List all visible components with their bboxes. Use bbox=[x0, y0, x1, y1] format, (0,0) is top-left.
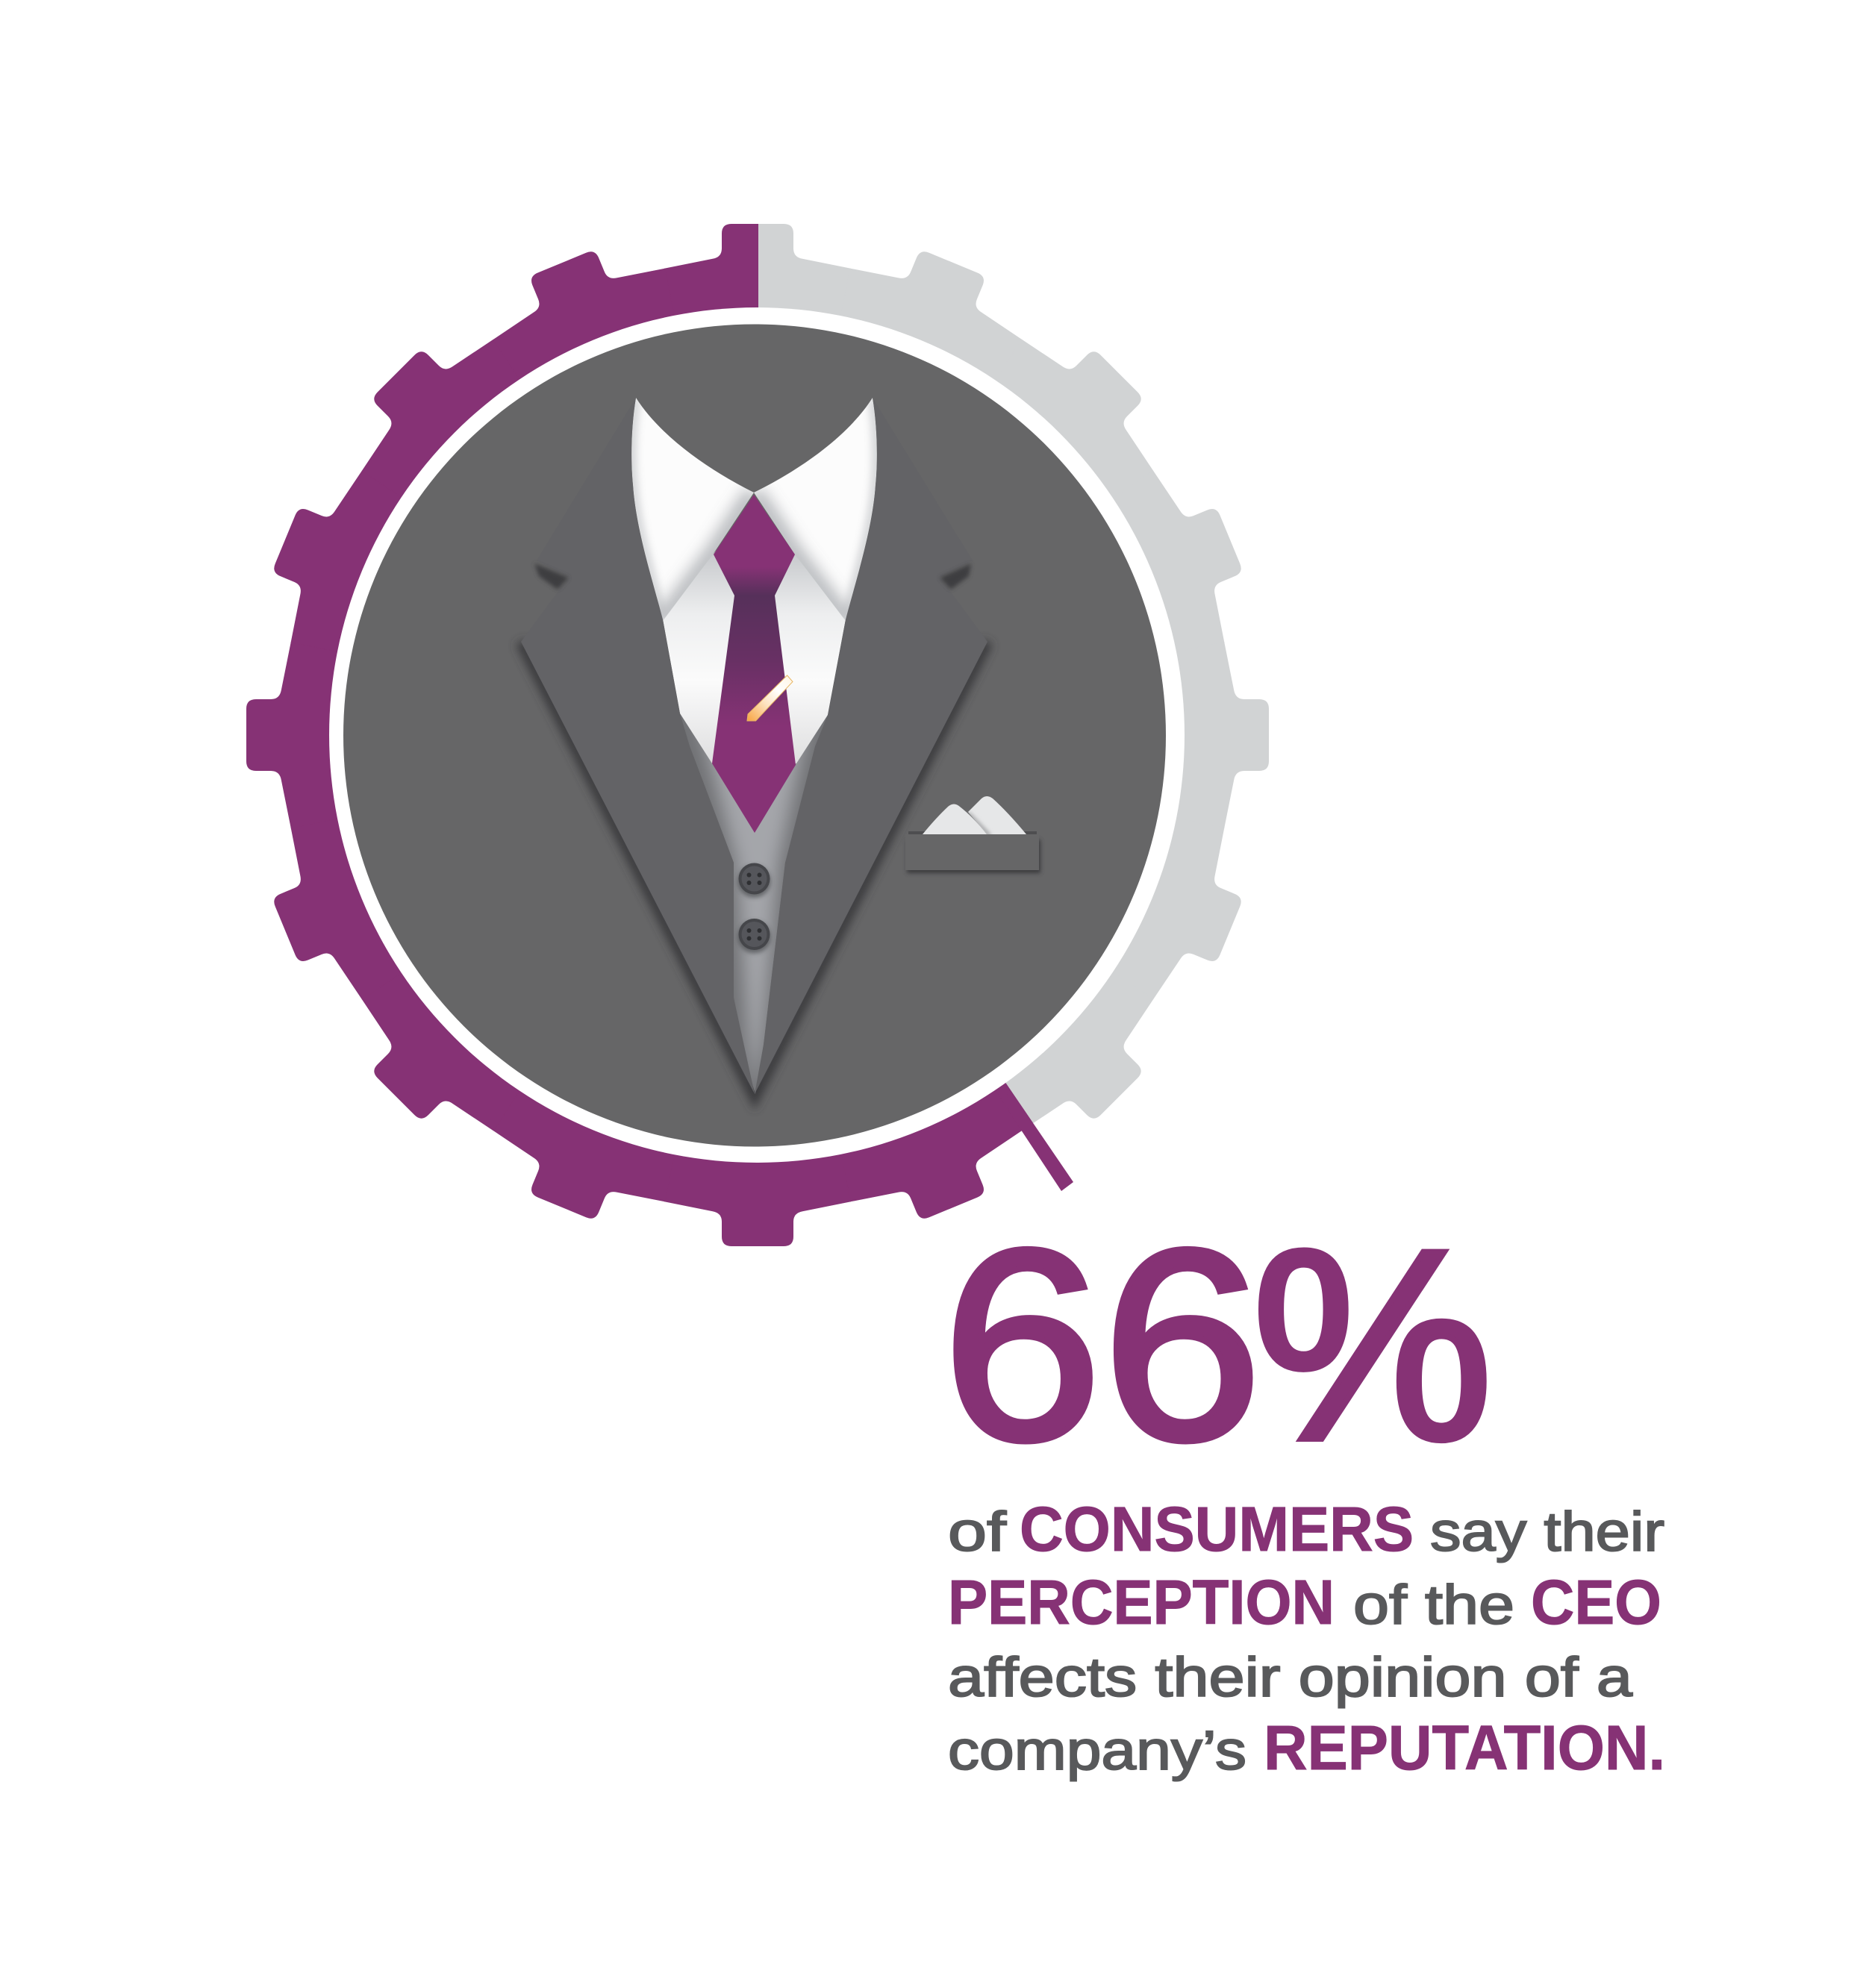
left lapel notch bbox=[534, 563, 569, 590]
progress tick mark bbox=[1006, 1084, 1073, 1191]
line 4: REPUTATION. bbox=[1264, 1713, 1665, 1783]
left lapel bbox=[521, 398, 755, 1094]
white ring bbox=[329, 307, 1185, 1163]
right lapel notch bbox=[940, 563, 971, 590]
line 4: company’s bbox=[948, 1719, 1246, 1781]
suit illustration bbox=[521, 388, 1040, 1097]
right lapel bbox=[755, 398, 987, 1094]
percent sign: % bbox=[1252, 1193, 1494, 1497]
pocket square bbox=[905, 796, 1040, 873]
gear: gray remainder bbox=[246, 224, 1269, 1246]
tie clip bbox=[747, 675, 793, 721]
line 2: PERCEPTION bbox=[948, 1567, 1335, 1637]
digits 66: 66 bbox=[942, 1193, 1262, 1497]
headline: 66% bbox=[942, 1193, 1494, 1497]
line 1: of bbox=[948, 1501, 1007, 1563]
line 4 bbox=[948, 1713, 1665, 1783]
line 1: say their bbox=[1430, 1501, 1664, 1563]
line 2 bbox=[948, 1567, 1661, 1637]
line 2: of the bbox=[1353, 1574, 1514, 1636]
gear ring bbox=[246, 224, 1269, 1246]
shirt bbox=[657, 548, 851, 769]
jacket shadow bbox=[521, 642, 987, 1097]
vest button top bbox=[737, 863, 770, 898]
statement text bbox=[948, 1494, 1665, 1783]
vest button bottom bbox=[737, 919, 770, 954]
line 1 bbox=[948, 1494, 1664, 1564]
line 1: CONSUMERS bbox=[1020, 1494, 1414, 1564]
line 3: affects their opinion of a bbox=[948, 1646, 1633, 1708]
gear: purple 66 percent progress bbox=[246, 224, 1033, 1246]
left collar bbox=[631, 398, 754, 621]
right collar bbox=[754, 398, 877, 621]
necktie bbox=[712, 495, 796, 833]
line 2: CEO bbox=[1531, 1567, 1661, 1637]
dark gray disc bbox=[343, 324, 1166, 1146]
vest bbox=[681, 715, 827, 1094]
